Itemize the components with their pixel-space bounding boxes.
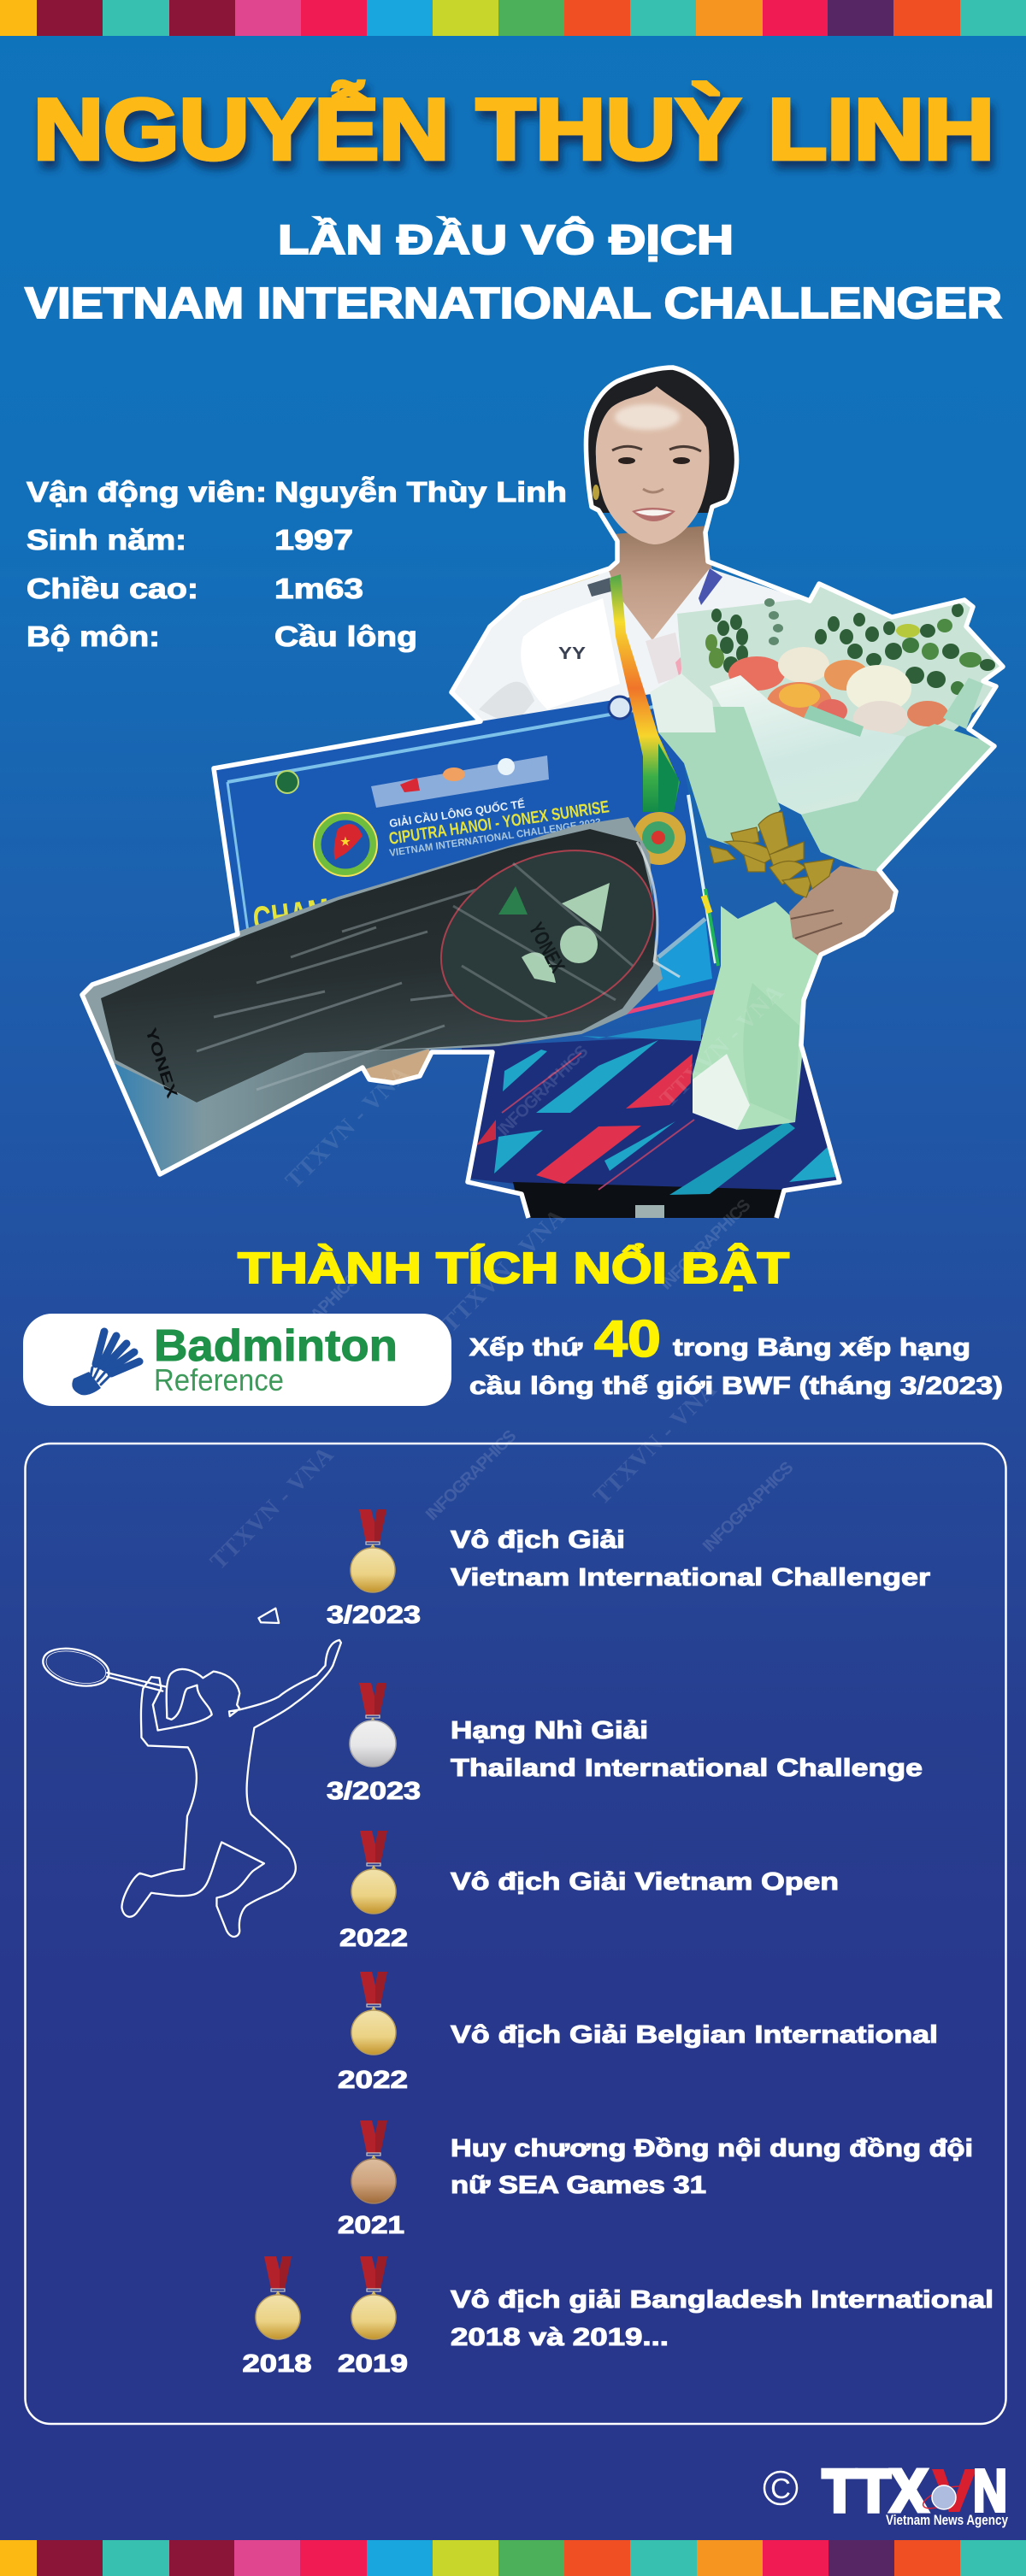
medal: bronze 2021 bbox=[351, 2120, 396, 2203]
logo: TTXVN: TTX bbox=[823, 2457, 928, 2524]
icon: copyright: C bbox=[770, 2473, 791, 2504]
panel: achievements bbox=[26, 1444, 1005, 2424]
bottom colour band bbox=[0, 2540, 1026, 2576]
achievement text: 2018 và 2019... bbox=[451, 2324, 669, 2351]
watermarks: INFOGRAPHICS bbox=[657, 1196, 755, 1294]
certificate: VIETNAM INTERNATIONAL CHALLENGE 2023 bbox=[388, 816, 602, 859]
athlete photo bbox=[77, 363, 1009, 1222]
athlete info: Cầu lông bbox=[274, 620, 417, 652]
photo cut-out outline bbox=[82, 368, 1003, 1218]
top colour band bbox=[0, 0, 1026, 36]
facial features bbox=[593, 446, 701, 521]
racket bag in plastic bbox=[77, 817, 681, 1179]
date label: 2019 bbox=[338, 2350, 408, 2378]
certificate: ★ bbox=[340, 835, 351, 848]
ranking text: 40 bbox=[594, 1310, 661, 1367]
date label: 2022 bbox=[339, 1925, 408, 1952]
achievement text: Vô địch Giải bbox=[451, 1526, 625, 1554]
medal: gold 2018 bbox=[256, 2256, 300, 2339]
watermarks: TTXVN - VNA bbox=[205, 1441, 339, 1575]
subtitle: VIETNAM INTERNATIONAL CHALLENGER bbox=[25, 279, 1002, 327]
achievement text bbox=[451, 1717, 923, 1782]
skirt bbox=[462, 1019, 846, 1222]
icon: badminton player outline bbox=[39, 1609, 341, 1937]
achievement text: Thailand International Challenge bbox=[451, 1755, 923, 1782]
date label: 3/2023 bbox=[327, 1778, 421, 1805]
date label: 2021 bbox=[338, 2212, 404, 2239]
shirt details bbox=[479, 568, 722, 726]
shirt bbox=[454, 568, 800, 721]
raised hand under the bag bbox=[366, 1050, 430, 1080]
icon: shuttlecock bbox=[72, 1332, 139, 1395]
athlete info: Chiều cao: bbox=[27, 573, 198, 604]
hand on bouquet bbox=[789, 866, 902, 957]
subtitle bbox=[25, 216, 1002, 327]
date label: 2022 bbox=[338, 2067, 408, 2094]
date label: 2018 bbox=[243, 2350, 311, 2378]
athlete info: 1m63 bbox=[274, 573, 363, 604]
watermarks: TTXVN - VNA bbox=[280, 1060, 415, 1194]
watermarks: INFOGRAPHICS bbox=[264, 1270, 363, 1368]
hair bbox=[588, 369, 734, 513]
front wrapping bbox=[710, 675, 906, 853]
watermarks: INFOGRAPHICS bbox=[699, 1458, 798, 1556]
certificate: CHAM bbox=[251, 891, 333, 942]
icon: copyright bbox=[764, 2472, 797, 2504]
section heading: THÀNH TÍCH NỔI BẬT bbox=[238, 1243, 789, 1292]
medal: gold 3/2023 bbox=[351, 1509, 395, 1592]
badge: Badminton Reference: Reference bbox=[154, 1362, 284, 1397]
achievement text bbox=[451, 2286, 994, 2351]
achievement text bbox=[451, 2135, 973, 2199]
watermarks: INFOGRAPHICS bbox=[494, 1042, 593, 1140]
title: NGUYỄN THUỲ LINH bbox=[33, 82, 994, 178]
racket bag in plastic: YONEX bbox=[524, 919, 569, 977]
gold bow bbox=[710, 812, 834, 897]
lower wrapping bbox=[693, 902, 825, 1130]
lanyard and medal bbox=[610, 574, 686, 865]
watermarks: TTXVN - VNA bbox=[655, 979, 789, 1113]
logo: TTXVN: N bbox=[973, 2457, 1007, 2524]
medal: gold 2019 bbox=[351, 2256, 396, 2339]
neck bbox=[605, 526, 712, 640]
logo: TTXVN: V bbox=[933, 2457, 976, 2524]
watermarks: INFOGRAPHICS bbox=[422, 1426, 521, 1525]
ranking text: trong Bảng xếp hạng bbox=[673, 1334, 970, 1362]
athlete info bbox=[27, 476, 567, 652]
watermarks: TTXVN - VNA bbox=[437, 1203, 571, 1338]
achievement text: nữ SEA Games 31 bbox=[451, 2172, 706, 2199]
medal: gold 2022 bbox=[351, 1831, 396, 1914]
athlete info: Sinh năm: bbox=[27, 524, 186, 556]
athlete info: Nguyễn Thùy Linh bbox=[274, 476, 567, 508]
badge: Badminton Reference bbox=[23, 1314, 451, 1406]
achievement text: Vô địch Giải Belgian International bbox=[451, 2021, 938, 2049]
achievement text bbox=[451, 1526, 930, 1591]
ranking text: Xếp thứ bbox=[469, 1334, 582, 1362]
subtitle: LẦN ĐẦU VÔ ĐỊCH bbox=[278, 216, 734, 263]
medal: silver 3/2023 bbox=[350, 1683, 396, 1767]
date label: 3/2023 bbox=[327, 1602, 421, 1629]
shirt details: YY bbox=[558, 644, 587, 663]
achievement text: Vietnam International Challenger bbox=[451, 1564, 930, 1591]
athlete info: Vận động viên: bbox=[27, 476, 267, 508]
certificate: CIPUTRA HANOI - YONEX SUNRISE bbox=[388, 797, 610, 849]
athlete info: Bộ môn: bbox=[27, 620, 160, 652]
badge: Badminton Reference: Badminton bbox=[154, 1321, 398, 1371]
racket bag in plastic: YONEX bbox=[142, 1026, 180, 1100]
logo: TTXVN bbox=[823, 2457, 1008, 2528]
ranking text: cầu lông thế giới BWF (tháng 3/2023) bbox=[469, 1373, 1003, 1400]
achievement text: Vô địch giải Bangladesh International bbox=[451, 2286, 994, 2314]
watermarks bbox=[205, 979, 798, 1575]
back wrapping bbox=[677, 586, 999, 737]
foliage bbox=[705, 598, 995, 695]
photo contents clipped to cut-out bbox=[77, 363, 1009, 1222]
flower bouquet bbox=[650, 581, 1009, 1130]
medal: gold 2022 bbox=[351, 1972, 396, 2055]
athlete info: 1997 bbox=[274, 524, 353, 556]
achievement text: Huy chương Đồng nội dung đồng đội bbox=[451, 2135, 973, 2162]
watermarks: TTXVN - VNA bbox=[588, 1376, 722, 1510]
face bbox=[596, 386, 709, 544]
certificate: GIẢI CẦU LÔNG QUỐC TẾ bbox=[388, 797, 526, 830]
achievement text: Vô địch Giải Vietnam Open bbox=[451, 1868, 839, 1896]
ranking text bbox=[469, 1310, 1003, 1400]
certificate bbox=[209, 691, 722, 1026]
achievement text: Hạng Nhì Giải bbox=[451, 1717, 648, 1744]
flowers bbox=[728, 647, 948, 735]
